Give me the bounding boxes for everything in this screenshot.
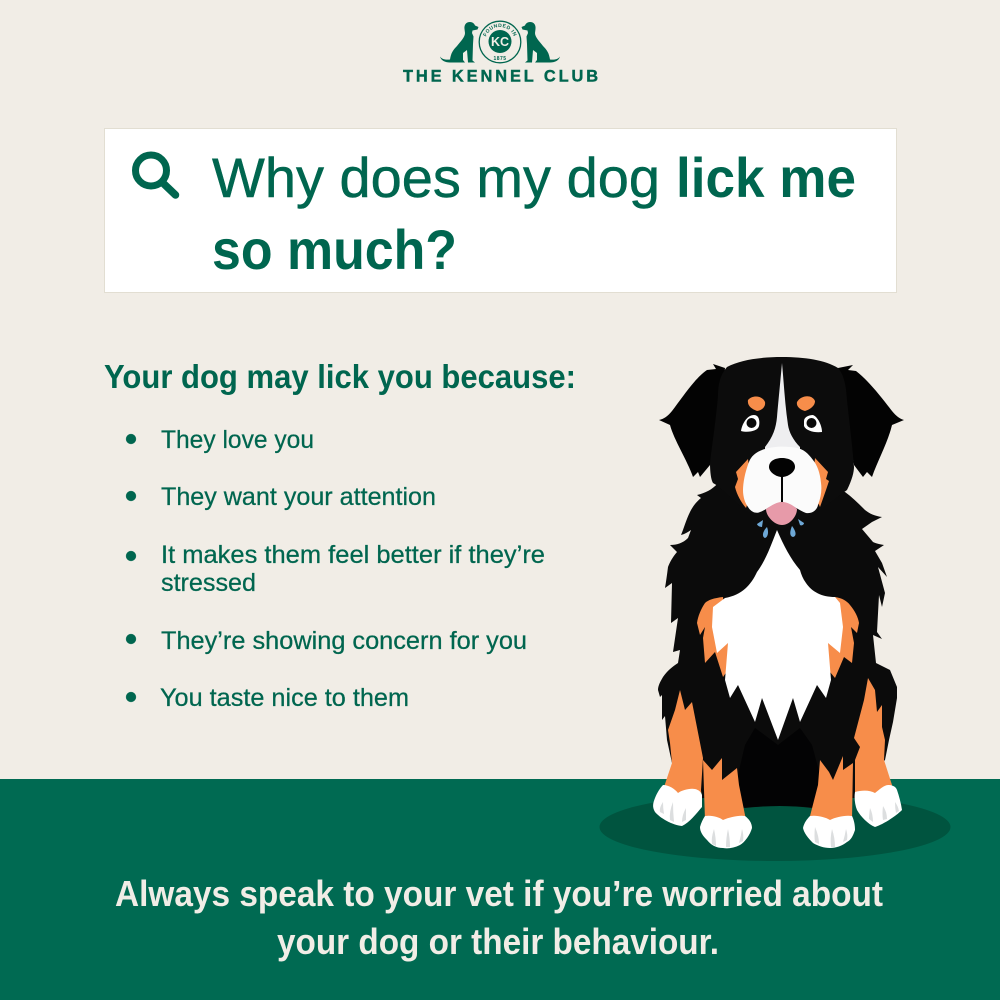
head [710,357,854,530]
title: so much? [212,218,457,281]
footer message [115,873,883,962]
panel: green footer band [0,779,1000,1000]
paw: front left [700,816,752,848]
leg separators [702,760,854,798]
bullet: stress: stressed [161,569,256,597]
body silhouette [658,483,897,808]
front left leg [703,758,746,820]
icon: left seated dog [440,22,478,62]
logo roundel: KC [491,35,509,49]
logo roundel [478,20,522,64]
title: Why does my dog [212,146,660,209]
illustration: Bernese mountain dog [653,357,904,848]
paw: front right [803,816,855,848]
bullet: stress [126,541,545,597]
chest shoulder orange [697,597,859,678]
paw: back left [653,785,702,826]
back left leg [663,690,703,800]
bullet list: reasons [126,426,545,712]
subheading: Your dog may lick you because: [104,358,576,395]
title: lick me [676,146,856,209]
blaze [765,363,800,452]
footer message: your dog or their behaviour. [277,921,719,962]
dog shadow [600,793,950,861]
panel: search box heading [104,128,896,292]
paw: back right [855,785,902,827]
front right leg [809,756,853,820]
icon: right seated dog [522,22,560,62]
icon: magnifying glass [136,155,176,195]
logo roundel: FOUNDED IN [483,24,517,36]
white muzzle [743,447,821,513]
title [212,146,856,281]
back right leg [854,678,892,800]
right ear [838,365,904,477]
bullet: attention: They want your attention [161,483,436,511]
drool drops [757,519,804,538]
nose and philtrum [769,458,795,502]
bullet: stress: It makes them feel better if they’re [161,541,545,569]
white chest [712,530,843,740]
left ear [659,364,725,477]
bullet: love: They love you [161,426,314,454]
logo: The Kennel Club [403,20,601,86]
orange cheeks [735,458,829,508]
logo roundel: 1875 [493,56,507,62]
logo wordmark: THE KENNEL CLUB [403,66,601,86]
bullet: concern: They’re showing concern for you [161,627,527,655]
eyebrows [748,396,815,411]
bullet: taste: You taste nice to them [160,684,409,712]
eyes [741,415,822,432]
tongue [766,502,797,525]
center belly shadow [738,728,820,808]
footer message: Always speak to your vet if you’re worried about [115,873,883,914]
